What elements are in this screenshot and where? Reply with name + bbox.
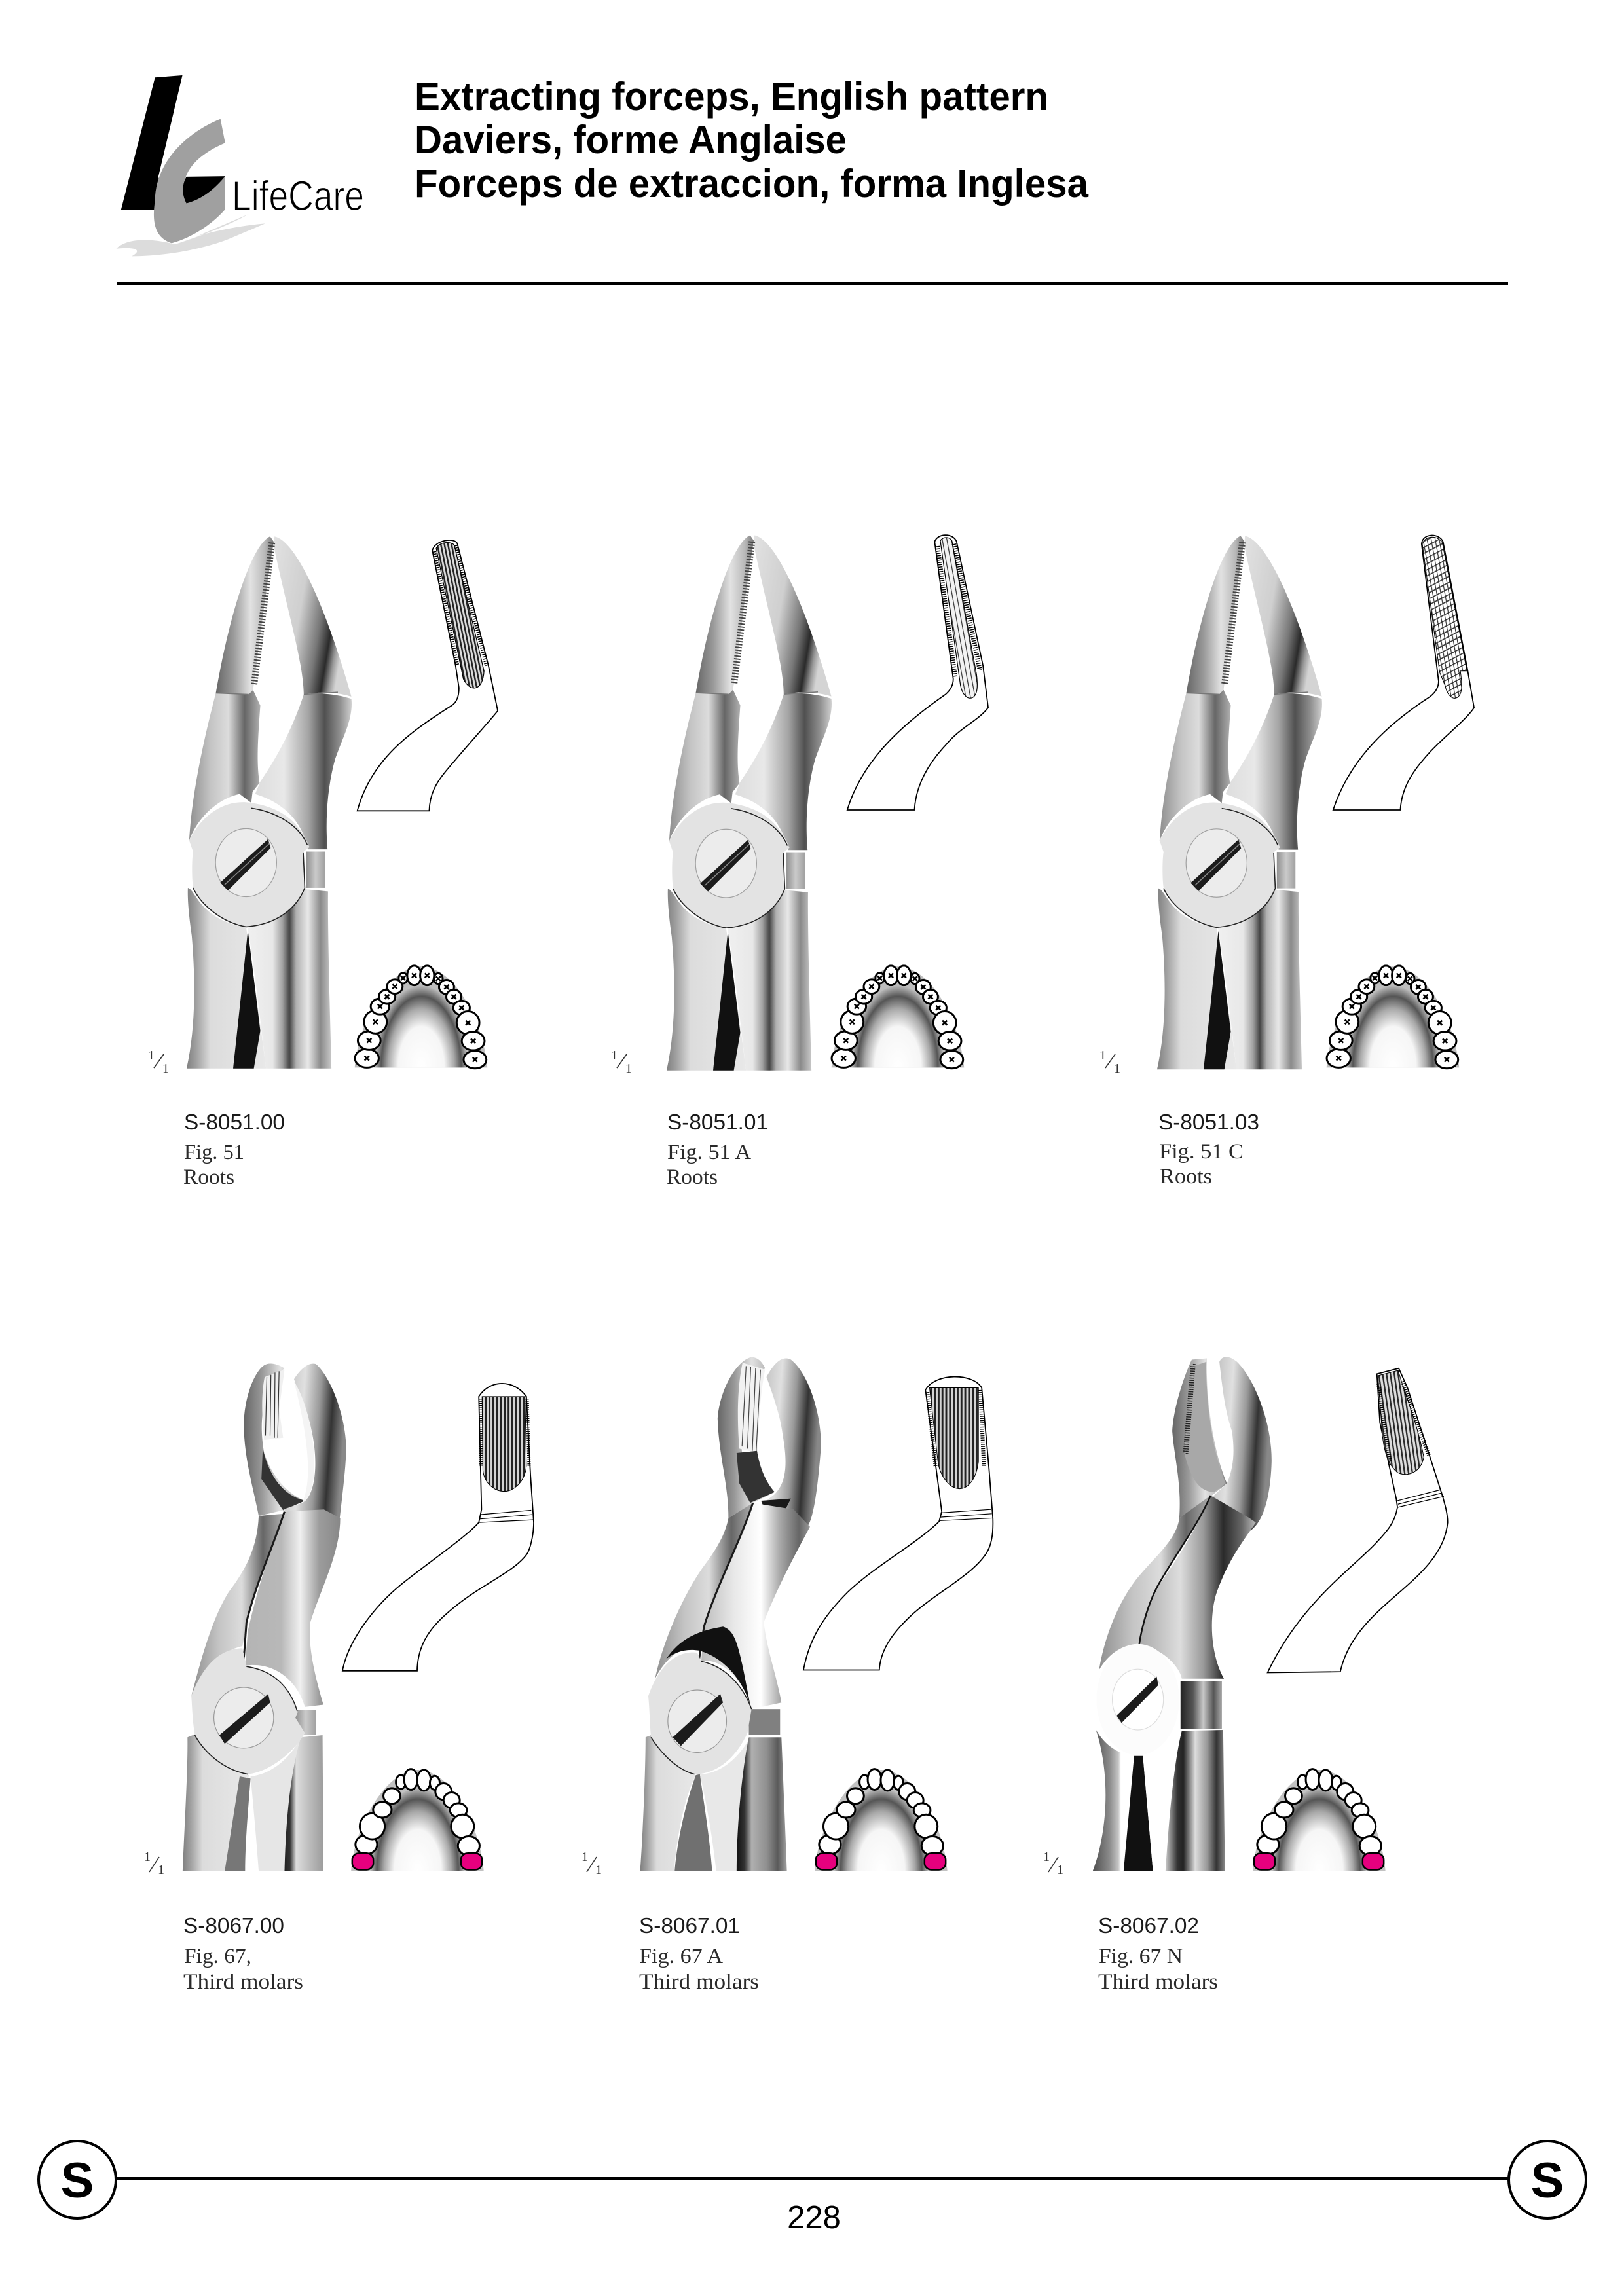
panel: S-8051.01 xyxy=(611,535,988,1189)
panel: S-8067.01 xyxy=(581,1357,993,1994)
caption: S-8067.01 xyxy=(639,1913,740,1937)
scale mark: 1 xyxy=(144,1850,151,1864)
page number: 228 xyxy=(787,2200,841,2235)
header xyxy=(117,75,1089,256)
scale mark: 1 xyxy=(595,1863,602,1877)
beak outline diagram xyxy=(342,1384,534,1671)
dental arch chart xyxy=(351,1769,484,1953)
footer xyxy=(39,2141,1586,2235)
caption: S-8067.02 xyxy=(1098,1913,1199,1937)
scale mark xyxy=(581,1850,602,1877)
caption: Third molars xyxy=(639,1970,759,1994)
forceps photo xyxy=(640,1357,821,1871)
caption: Third molars xyxy=(183,1970,303,1994)
scale mark: 1 xyxy=(148,1048,155,1063)
title: Extracting forceps, English pattern xyxy=(415,75,1048,119)
beak outline diagram xyxy=(803,1377,993,1670)
section badge left xyxy=(39,2141,116,2218)
beak outline diagram xyxy=(847,535,988,810)
forceps photo xyxy=(187,536,352,1069)
caption: Roots xyxy=(1160,1165,1212,1188)
section badge right xyxy=(1509,2141,1586,2218)
scale mark xyxy=(144,1850,164,1877)
caption: Third molars xyxy=(1098,1970,1218,1994)
scale mark: 1 xyxy=(611,1048,618,1063)
logo wordmark: LifeCare xyxy=(232,172,364,219)
dental arch chart xyxy=(1327,966,1459,1149)
logo grey C xyxy=(154,119,225,243)
forceps photo xyxy=(667,535,832,1071)
scale mark xyxy=(611,1048,632,1076)
beak outline diagram xyxy=(1333,536,1474,810)
scale mark: 1 xyxy=(1114,1061,1120,1076)
scale mark: 1 xyxy=(162,1061,169,1076)
caption xyxy=(639,1913,759,1994)
panel: S-8067.02 xyxy=(1043,1357,1448,1994)
beak outline diagram xyxy=(358,540,498,811)
panel: S-8051.00 xyxy=(148,536,498,1189)
title xyxy=(415,75,1089,206)
dental arch chart xyxy=(832,966,964,1149)
caption xyxy=(1098,1913,1218,1994)
forceps photo xyxy=(183,1363,346,1871)
caption: S-8051.00 xyxy=(184,1110,285,1134)
caption: Fig. 67, xyxy=(184,1945,251,1968)
scale mark xyxy=(1043,1850,1063,1877)
forceps photo xyxy=(1157,536,1322,1069)
caption: S-8067.00 xyxy=(183,1913,284,1937)
scale mark: 1 xyxy=(1099,1048,1106,1063)
scale mark xyxy=(148,1048,169,1076)
caption: Fig. 67 N xyxy=(1099,1945,1183,1968)
caption: S-8051.03 xyxy=(1158,1110,1259,1134)
caption xyxy=(183,1110,285,1189)
title: Forceps de extraccion, forma Inglesa xyxy=(415,162,1089,206)
panel: S-8067.00 xyxy=(144,1363,534,1994)
caption: Fig. 51 xyxy=(184,1141,244,1164)
scale mark: 1 xyxy=(1043,1850,1050,1864)
scale mark: 1 xyxy=(1057,1863,1063,1877)
logo: LifeCare xyxy=(117,75,364,256)
caption xyxy=(1158,1110,1259,1188)
caption xyxy=(183,1913,303,1994)
scale mark: 1 xyxy=(581,1850,588,1864)
scale mark: 1 xyxy=(625,1061,632,1076)
dental arch chart xyxy=(1253,1769,1386,1953)
caption: Roots xyxy=(667,1166,718,1189)
caption: Roots xyxy=(183,1166,234,1189)
logo black L xyxy=(121,75,183,210)
section badge left: S xyxy=(61,2153,94,2209)
caption: Fig. 67 A xyxy=(639,1945,723,1968)
scale mark xyxy=(1099,1048,1120,1076)
logo shadow xyxy=(117,214,265,256)
caption xyxy=(667,1110,768,1189)
caption: S-8051.01 xyxy=(667,1110,768,1134)
dental arch chart xyxy=(355,966,487,1149)
logo black wedge xyxy=(183,176,225,203)
scale mark: 1 xyxy=(158,1863,164,1877)
caption: Fig. 51 C xyxy=(1159,1140,1244,1164)
forceps photo xyxy=(1093,1357,1272,1871)
dental arch chart xyxy=(815,1769,948,1953)
section badge right: S xyxy=(1531,2153,1564,2209)
beak outline diagram xyxy=(1268,1368,1448,1672)
caption: Fig. 51 A xyxy=(667,1141,751,1164)
title: Daviers, forme Anglaise xyxy=(415,118,847,162)
panel: S-8051.03 xyxy=(1099,536,1474,1188)
